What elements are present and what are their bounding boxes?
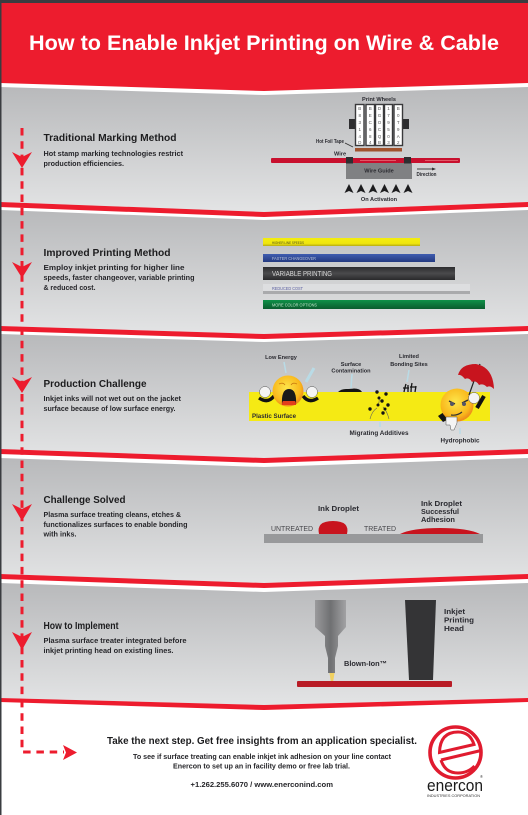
print wheels: 3 (358, 120, 361, 125)
text block: challenge solved: Plasma surface treating cleans, etches & (44, 510, 181, 519)
print wheels: 0 (387, 134, 390, 139)
hot foil tape (355, 148, 402, 152)
label: successful adhesion (421, 499, 463, 524)
direction arrow: Direction (416, 172, 437, 178)
header banner (0, 0, 528, 91)
print wheels: B (358, 106, 361, 111)
left page edge (0, 0, 2, 815)
label: plastic surface: Plastic Surface (252, 414, 297, 420)
diagram: ink droplets (264, 499, 483, 543)
umbrella (458, 364, 494, 395)
arrowhead 1 (12, 152, 32, 168)
call to action (107, 735, 417, 789)
dashed process arrow (12, 128, 77, 760)
text block: improved printing (44, 263, 195, 292)
surface bar (264, 534, 483, 543)
text block: challenge solved (43, 510, 188, 538)
label: low energy: Low Energy (265, 355, 298, 361)
label: limited bonding sites: Limited (399, 354, 420, 360)
bar: higher line speeds: HIGHER LINE SPEEDS (272, 240, 304, 245)
text block: challenge solved: with inks. (43, 530, 76, 538)
label: inkjet printing head: Printing (444, 616, 474, 624)
bar: variable printing (263, 267, 455, 280)
bar: variable printing: VARIABLE PRINTING (272, 269, 332, 278)
text block: traditional marking (44, 149, 183, 168)
heading: how to implement: How to Implement (44, 620, 119, 632)
wire guide: Wire Guide (364, 168, 394, 174)
icon: migrating additives (368, 390, 390, 419)
print wheels: 9 (387, 120, 390, 125)
text block: traditional marking: Hot stamp marking technologies restrict (44, 149, 183, 158)
plastic surface strip (249, 392, 490, 421)
contact details: +1.262.255.6070 / www.enerconind.com (190, 782, 333, 789)
bar: more color options (263, 300, 485, 309)
text block: production challenge: Inkjet inks will not wet out on the jacket (44, 394, 181, 403)
panel: traditional marking method (0, 87, 528, 217)
text block: production challenge (44, 394, 181, 413)
wire (297, 681, 452, 687)
label: hot foil tape: Hot Foil Tape (316, 139, 344, 145)
ink droplet: untreated (319, 521, 347, 534)
diagram: plastic surface (249, 354, 494, 444)
label: successful adhesion: Ink Droplet (421, 499, 463, 508)
heading: traditional marking method: Traditional Marking Method (44, 132, 176, 144)
logo: enercon: INDUSTRIES CORPORATION (427, 793, 480, 798)
wire (271, 158, 460, 163)
inkjet printing head (405, 600, 436, 680)
logo: enercon: ® (480, 774, 483, 779)
icon: bonding sites (403, 383, 416, 392)
print wheels: T (397, 120, 400, 125)
logo: enercon (427, 727, 483, 798)
bar: higher line speeds (263, 238, 420, 246)
activation arrows (344, 184, 412, 193)
text block: challenge solved: functionalizes surfaces to enable bonding (44, 520, 188, 529)
label: surface contamination: Surface (341, 362, 361, 368)
heading: production challenge: Production Challenge (44, 378, 147, 390)
diagram: treater and print head (297, 600, 474, 687)
print wheels: D (378, 106, 382, 111)
bar: faster changeover (263, 254, 435, 262)
label: hydrophobic: Hydrophobic (440, 438, 480, 444)
icon: crying face (259, 376, 318, 406)
arrowhead 4 (12, 504, 32, 521)
print wheels: 4 (369, 140, 372, 145)
heading: challenge solved: Challenge Solved (44, 494, 126, 506)
pointer lines (284, 362, 460, 434)
title: How to Enable Inkjet Printing on Wire & Cable (29, 31, 499, 55)
print wheels: 4 (358, 134, 361, 139)
bar: more color options: MORE COLOR OPTIONS (272, 302, 317, 308)
printed wires chart (263, 238, 485, 309)
label: limited bonding sites (390, 354, 428, 368)
print wheels: 5 (387, 127, 390, 132)
icon: angry face with umbrella (438, 364, 494, 430)
contamination blob (338, 388, 362, 392)
print wheels: G (378, 113, 382, 118)
label: treated: TREATED (364, 524, 397, 533)
text block: production challenge: surface because of low surface energy. (44, 404, 176, 413)
label: successful adhesion: Adhesion (421, 515, 455, 524)
direction arrow (416, 168, 437, 178)
label: migrating additives: Migrating Additives (350, 431, 409, 437)
arrowhead end (63, 745, 77, 760)
diagram: hot stamp machine (271, 97, 460, 203)
print wheels: D (358, 140, 362, 145)
label: inkjet printing head (444, 607, 474, 633)
print wheels (349, 104, 409, 146)
label: successful adhesion: Successful (421, 507, 459, 516)
print wheels: C (378, 127, 382, 132)
cta text: To see if surface treating can enable inkjet ink adhesion on your line contact (133, 754, 392, 761)
label: wire: Wire (334, 152, 346, 158)
text block: how to implement (44, 636, 186, 655)
text block: improved printing: Employ inkjet printing for higher line (44, 263, 184, 272)
print wheels: 0 (397, 113, 400, 118)
arrowhead 5 (12, 632, 32, 650)
bar: reduced cost: REDUCED COST (272, 286, 303, 291)
wire guide (346, 157, 412, 179)
print wheels: 6 (369, 127, 372, 132)
print wheels: 9 (397, 127, 400, 132)
print wheels: 8 (358, 113, 361, 118)
text block: how to implement: Plasma surface treater integrated before (44, 636, 186, 645)
text block: traditional marking: production efficiencies. (44, 159, 124, 168)
bar: faster changeover: FASTER CHANGEOVER (272, 256, 317, 261)
print wheels: B (378, 140, 381, 145)
print wheels: Q (378, 134, 382, 139)
blown-ion nozzle (315, 600, 346, 686)
print wheels: O (378, 120, 382, 125)
label: print wheels: Print Wheels (362, 97, 396, 103)
label: on activation: On Activation (361, 197, 398, 203)
label: surface contamination (331, 362, 371, 374)
text block: improved printing: & reduced cost. (44, 283, 96, 292)
text block: improved printing: speeds, faster changeover, variable printing (44, 273, 195, 282)
panel: production challenge (0, 334, 528, 463)
ink droplet: treated (400, 528, 480, 534)
print wheels: 1 (387, 106, 390, 111)
label: untreated: UNTREATED (271, 524, 314, 533)
label: surface contamination: Contamination (331, 368, 371, 374)
print wheels: 3 (387, 140, 390, 145)
text block: how to implement: inkjet printing head on existing lines. (44, 646, 174, 655)
label: limited bonding sites: Bonding Sites (390, 362, 428, 368)
heading: improved printing method: Improved Printing Method (44, 247, 170, 259)
cta text: Enercon to set up an in facility demo or free lab trial. (173, 764, 350, 770)
arrowhead 2 (12, 262, 32, 278)
bar: reduced cost (263, 284, 470, 294)
label: ink droplet: Ink Droplet (318, 504, 360, 513)
panel: improved printing method (0, 210, 528, 339)
cta heading: Take the next step. Get free insights from an application specialist. (107, 735, 417, 747)
panel: how to implement (0, 583, 528, 710)
label: inkjet printing head: Head (444, 624, 464, 633)
arrowhead 3 (12, 377, 32, 393)
print wheels: E (369, 113, 372, 118)
print wheels: 7 (387, 113, 390, 118)
label: inkjet printing head: Inkjet (444, 607, 466, 616)
label: blown-ion: Blown-Ion™ (344, 659, 387, 668)
print wheels: 2 (397, 140, 400, 145)
print wheels: A (397, 134, 400, 139)
cta text (133, 754, 392, 770)
logo: enercon: enercon (427, 776, 483, 795)
panel: challenge solved (0, 458, 528, 588)
print wheels: 1 (358, 127, 361, 132)
print wheels: 8 (369, 134, 372, 139)
print wheels: B (369, 106, 372, 111)
print wheels: B (397, 106, 400, 111)
print wheels: C (369, 120, 373, 125)
